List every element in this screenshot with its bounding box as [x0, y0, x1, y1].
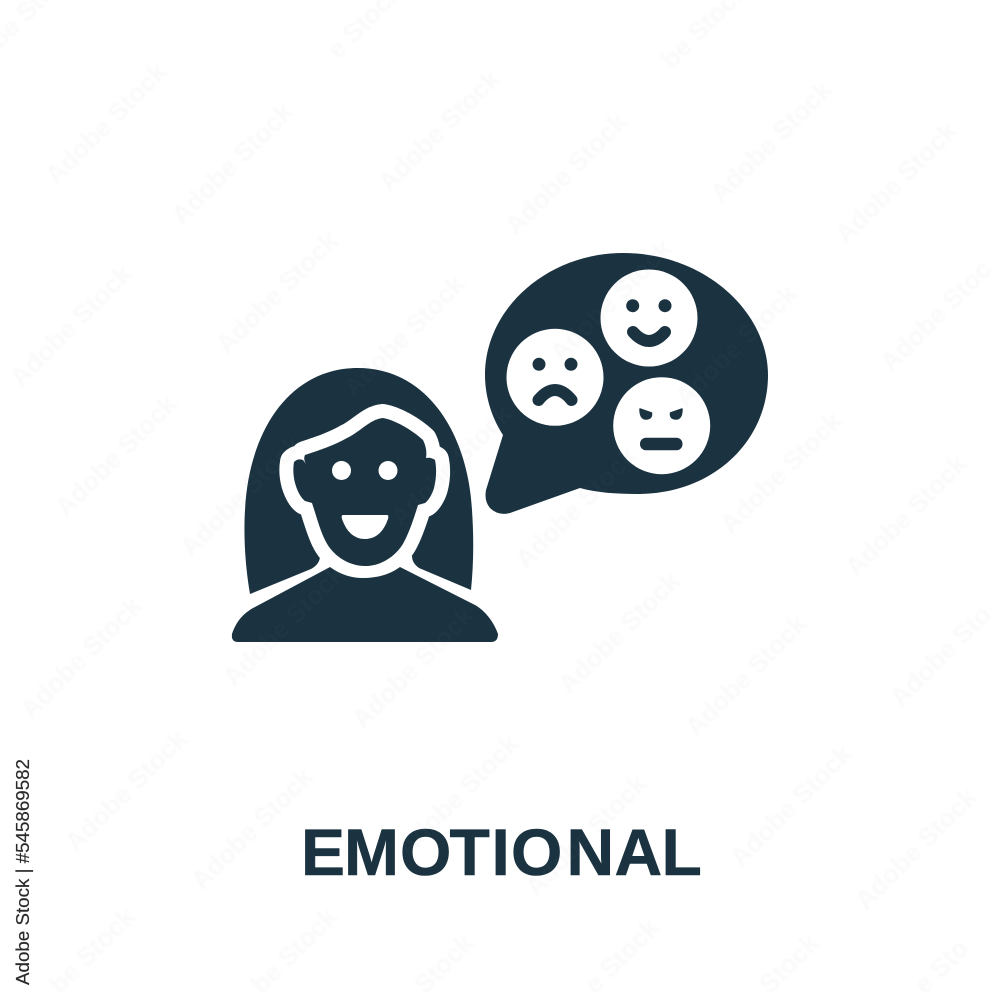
watermark pattern: Adobe Stock [679, 608, 813, 742]
icon: woman with long hair [232, 368, 498, 642]
watermark pattern: Adobe Stock [165, 96, 299, 230]
watermark pattern: Adobe Stock [372, 63, 506, 197]
watermark pattern: Adobe Stock [39, 56, 173, 190]
watermark pattern: Adobe Stock [210, 225, 344, 359]
stock id vertical caption: Adobe Stock | #545869582 [13, 759, 33, 985]
shoulders [232, 567, 498, 642]
watermark pattern: Adobe Stock [49, 388, 183, 522]
smiling mouth [342, 515, 388, 539]
eyes [332, 461, 351, 480]
watermark pattern: Adobe Stock [704, 74, 838, 208]
hair [244, 368, 473, 594]
watermark pattern: Adobe Stock [391, 728, 525, 862]
watermark pattern: Adobe Stock [217, 558, 351, 692]
watermark pattern: Stock [408, 928, 480, 999]
watermark pattern: Adobe Stock [849, 781, 983, 915]
watermark pattern: Adobe Stock [59, 723, 193, 857]
watermark pattern: Stock [753, 928, 825, 999]
watermark pattern: Adobe Stock [544, 233, 678, 367]
watermark pattern: Adobe Stock [724, 738, 858, 872]
sad face [506, 329, 604, 426]
watermark pattern: Adobe Stock [839, 448, 973, 582]
watermark pattern: Adobe Stoc [874, 254, 997, 377]
angry face [613, 377, 710, 474]
watermark pattern: Adobe Stock [14, 590, 148, 724]
watermark pattern: Adobe Stock [174, 428, 308, 562]
watermark pattern: be Stock [245, 901, 343, 999]
watermark pattern: Adobe Stock [185, 761, 319, 895]
watermark pattern: be Stock [43, 901, 141, 999]
watermark pattern: Adobe Stock [714, 405, 848, 539]
watermark pattern: Adobe Stock [519, 768, 653, 902]
happy face [600, 270, 698, 366]
title: EMOTIONAL [301, 815, 702, 889]
watermark pattern: Adobe Sto [884, 599, 997, 712]
icon: speech bubble with emotions [485, 253, 768, 514]
bubble [485, 253, 768, 514]
watermark pattern: Adobe Stock [499, 106, 633, 240]
watermark pattern: e Stock [578, 912, 665, 999]
watermark pattern: Adobe Stock [509, 440, 643, 574]
watermark pattern: e Sto [908, 933, 974, 999]
face with white outline [293, 418, 436, 566]
watermark pattern: Adobe Stock [669, 278, 803, 412]
watermark pattern: Adobe Stock [346, 600, 480, 734]
watermark pattern: Adobe Stock [337, 268, 471, 402]
watermark pattern: Adobe Stock [4, 258, 138, 392]
watermark pattern: Adobe Stock [552, 565, 686, 699]
watermark pattern: Adobe Stock [384, 398, 518, 532]
watermark pattern: Adobe Stock [829, 115, 963, 249]
